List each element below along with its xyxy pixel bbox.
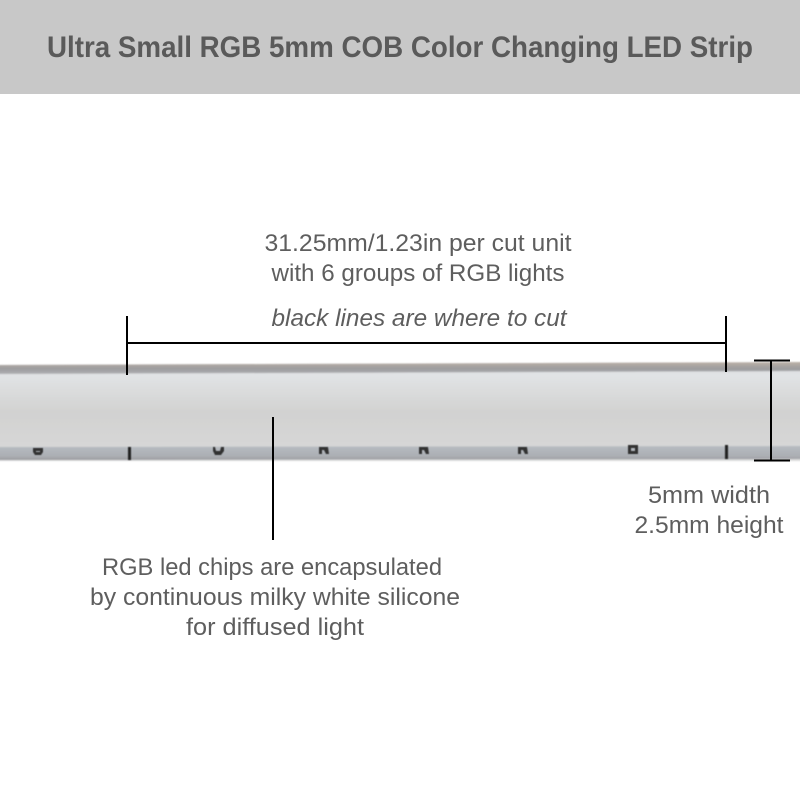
title banner <box>0 0 800 94</box>
LED strip photo <box>0 362 800 461</box>
silicone description: for diffused light <box>186 614 364 641</box>
cut line note: black lines are where to cut <box>272 305 568 332</box>
cut unit description: 31.25mm/1.23in per cut unit <box>264 230 572 257</box>
cut span dimension line <box>127 316 727 375</box>
chip marks on strip <box>33 445 638 455</box>
silicone leader line <box>272 417 274 540</box>
silicone description: by continuous milky white silicone <box>90 584 460 611</box>
cut unit description <box>264 230 572 287</box>
width dimension bracket <box>754 360 790 460</box>
silicone description: RGB led chips are encapsulated <box>102 554 442 581</box>
strip size label: 5mm width <box>648 482 770 509</box>
silicone description <box>90 554 460 641</box>
cut unit description: with 6 groups of RGB lights <box>270 260 564 287</box>
cut marks on strip <box>128 445 728 460</box>
strip size label <box>634 482 784 539</box>
strip size label: 2.5mm height <box>634 512 784 539</box>
title: Ultra Small RGB 5mm COB Color Changing LED Strip <box>47 31 753 64</box>
